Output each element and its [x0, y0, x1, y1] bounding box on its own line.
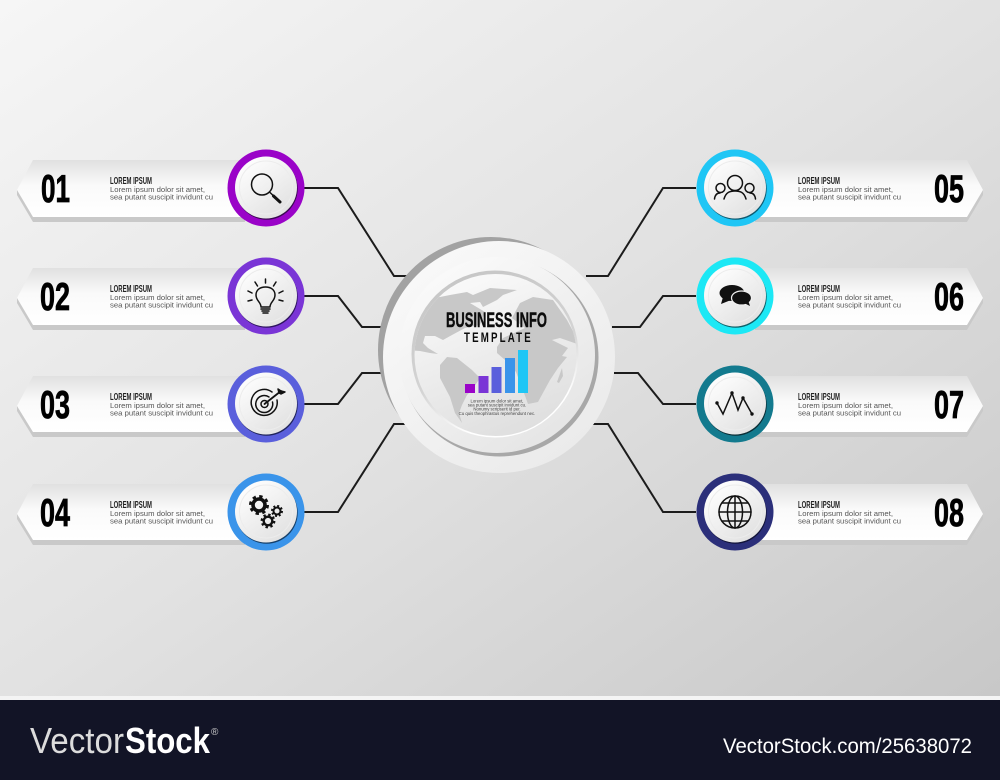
- item 04: [17, 474, 304, 550]
- text 08: Lorem ipsum dolor sit amet,: [798, 509, 893, 518]
- ribbon 04: [17, 484, 260, 545]
- number 06: 06: [934, 276, 964, 319]
- text 03: LOREM IPSUM: [110, 392, 152, 403]
- icon: gears: [250, 496, 282, 527]
- ribbon 08: [740, 484, 983, 545]
- icon: magnifier: [252, 174, 280, 202]
- connector lines: [304, 188, 696, 512]
- crescent: outer grey: [378, 237, 604, 463]
- icon: chat bubbles: [720, 285, 752, 306]
- text 02: [110, 284, 213, 310]
- badge 06: [696, 258, 774, 334]
- footer band: [0, 696, 1000, 780]
- badge 03: [228, 366, 304, 442]
- crescent: middle grey: [400, 258, 598, 456]
- caption: [459, 398, 535, 416]
- outer disc: [383, 241, 615, 473]
- text 02: Lorem ipsum dolor sit amet,: [110, 293, 205, 302]
- badge 01: [228, 150, 304, 226]
- ribbon 05: [740, 160, 983, 222]
- text 01: [110, 176, 213, 202]
- text 05: Lorem ipsum dolor sit amet,: [798, 185, 893, 194]
- text 07: LOREM IPSUM: [798, 392, 840, 403]
- item 03: [17, 366, 304, 442]
- badge 07: [696, 366, 774, 442]
- text 07: [798, 392, 901, 418]
- text 04: LOREM IPSUM: [110, 500, 152, 511]
- central medallion: [378, 237, 615, 473]
- text 05: [798, 176, 901, 202]
- item 07: [696, 366, 983, 442]
- number 01: 01: [41, 168, 70, 211]
- text 03: [110, 392, 213, 418]
- badge 05: [696, 150, 774, 226]
- text 08: LOREM IPSUM: [798, 500, 840, 511]
- number 04: 04: [40, 492, 70, 535]
- ribbon 02: [17, 268, 260, 330]
- text 06: Lorem ipsum dolor sit amet,: [798, 293, 893, 302]
- footer logo: Stock: [125, 720, 211, 761]
- icon: zigzag line: [715, 391, 754, 416]
- text 06: LOREM IPSUM: [798, 284, 840, 295]
- item 06: [696, 258, 983, 334]
- text 01: sea putant suscipit invidunt cu: [110, 192, 213, 202]
- text 04: sea putant suscipit invidunt cu: [110, 516, 213, 526]
- badge 04: [228, 474, 304, 550]
- footer logo: ®: [211, 727, 219, 738]
- footer logo: Vector: [30, 720, 124, 761]
- text 06: [798, 284, 901, 310]
- ribbon 01: [17, 160, 260, 222]
- text 05: LOREM IPSUM: [798, 176, 840, 187]
- text 05: sea putant suscipit invidunt cu: [798, 192, 901, 202]
- text 07: Lorem ipsum dolor sit amet,: [798, 401, 893, 410]
- footer logo: [30, 720, 219, 761]
- number 08: 08: [934, 492, 964, 535]
- icon: target: [251, 389, 285, 415]
- badge 08: [696, 474, 774, 550]
- footer url: VectorStock.com/25638072: [723, 735, 972, 758]
- middle disc: [399, 257, 595, 453]
- text 08: [798, 500, 901, 526]
- world map: [405, 288, 580, 423]
- item 01: [17, 150, 304, 226]
- text 02: sea putant suscipit invidunt cu: [110, 300, 213, 310]
- ribbon 06: [740, 268, 983, 330]
- number 02: 02: [40, 276, 70, 319]
- globe disc: [414, 274, 576, 436]
- icon: people: [714, 176, 756, 199]
- text 04: [110, 500, 213, 526]
- text 01: Lorem ipsum dolor sit amet,: [110, 185, 205, 194]
- item 02: [17, 258, 304, 334]
- caption: sea putant suscipit invidunt cu.: [468, 402, 526, 408]
- ribbon 07: [740, 376, 983, 437]
- caption: Nonumy scripserit id per.: [473, 407, 521, 412]
- text 03: sea putant suscipit invidunt cu: [110, 408, 213, 418]
- title: BUSINESS INFO: [446, 309, 547, 332]
- number 05: 05: [934, 168, 964, 211]
- number 07: 07: [934, 384, 964, 427]
- globe ring: [412, 270, 578, 438]
- text 04: Lorem ipsum dolor sit amet,: [110, 509, 205, 518]
- text 06: sea putant suscipit invidunt cu: [798, 300, 901, 310]
- text 08: sea putant suscipit invidunt cu: [798, 516, 901, 526]
- ribbon 03: [17, 376, 260, 437]
- number 03: 03: [40, 384, 70, 427]
- item 08: [696, 474, 983, 550]
- icon: globe: [719, 496, 751, 528]
- text 01: LOREM IPSUM: [110, 176, 152, 187]
- icon: light bulb: [248, 279, 283, 313]
- item 05: [696, 150, 983, 226]
- badge 02: [228, 258, 304, 334]
- caption: Cu quis theophrastus reprehendunt nec.: [459, 411, 535, 416]
- bar chart: [465, 350, 528, 393]
- subtitle: TEMPLATE: [464, 331, 533, 345]
- text 03: Lorem ipsum dolor sit amet,: [110, 401, 205, 410]
- text 02: LOREM IPSUM: [110, 284, 152, 295]
- caption: Lorem ipsum dolor sit amet,: [470, 398, 524, 403]
- text 07: sea putant suscipit invidunt cu: [798, 408, 901, 418]
